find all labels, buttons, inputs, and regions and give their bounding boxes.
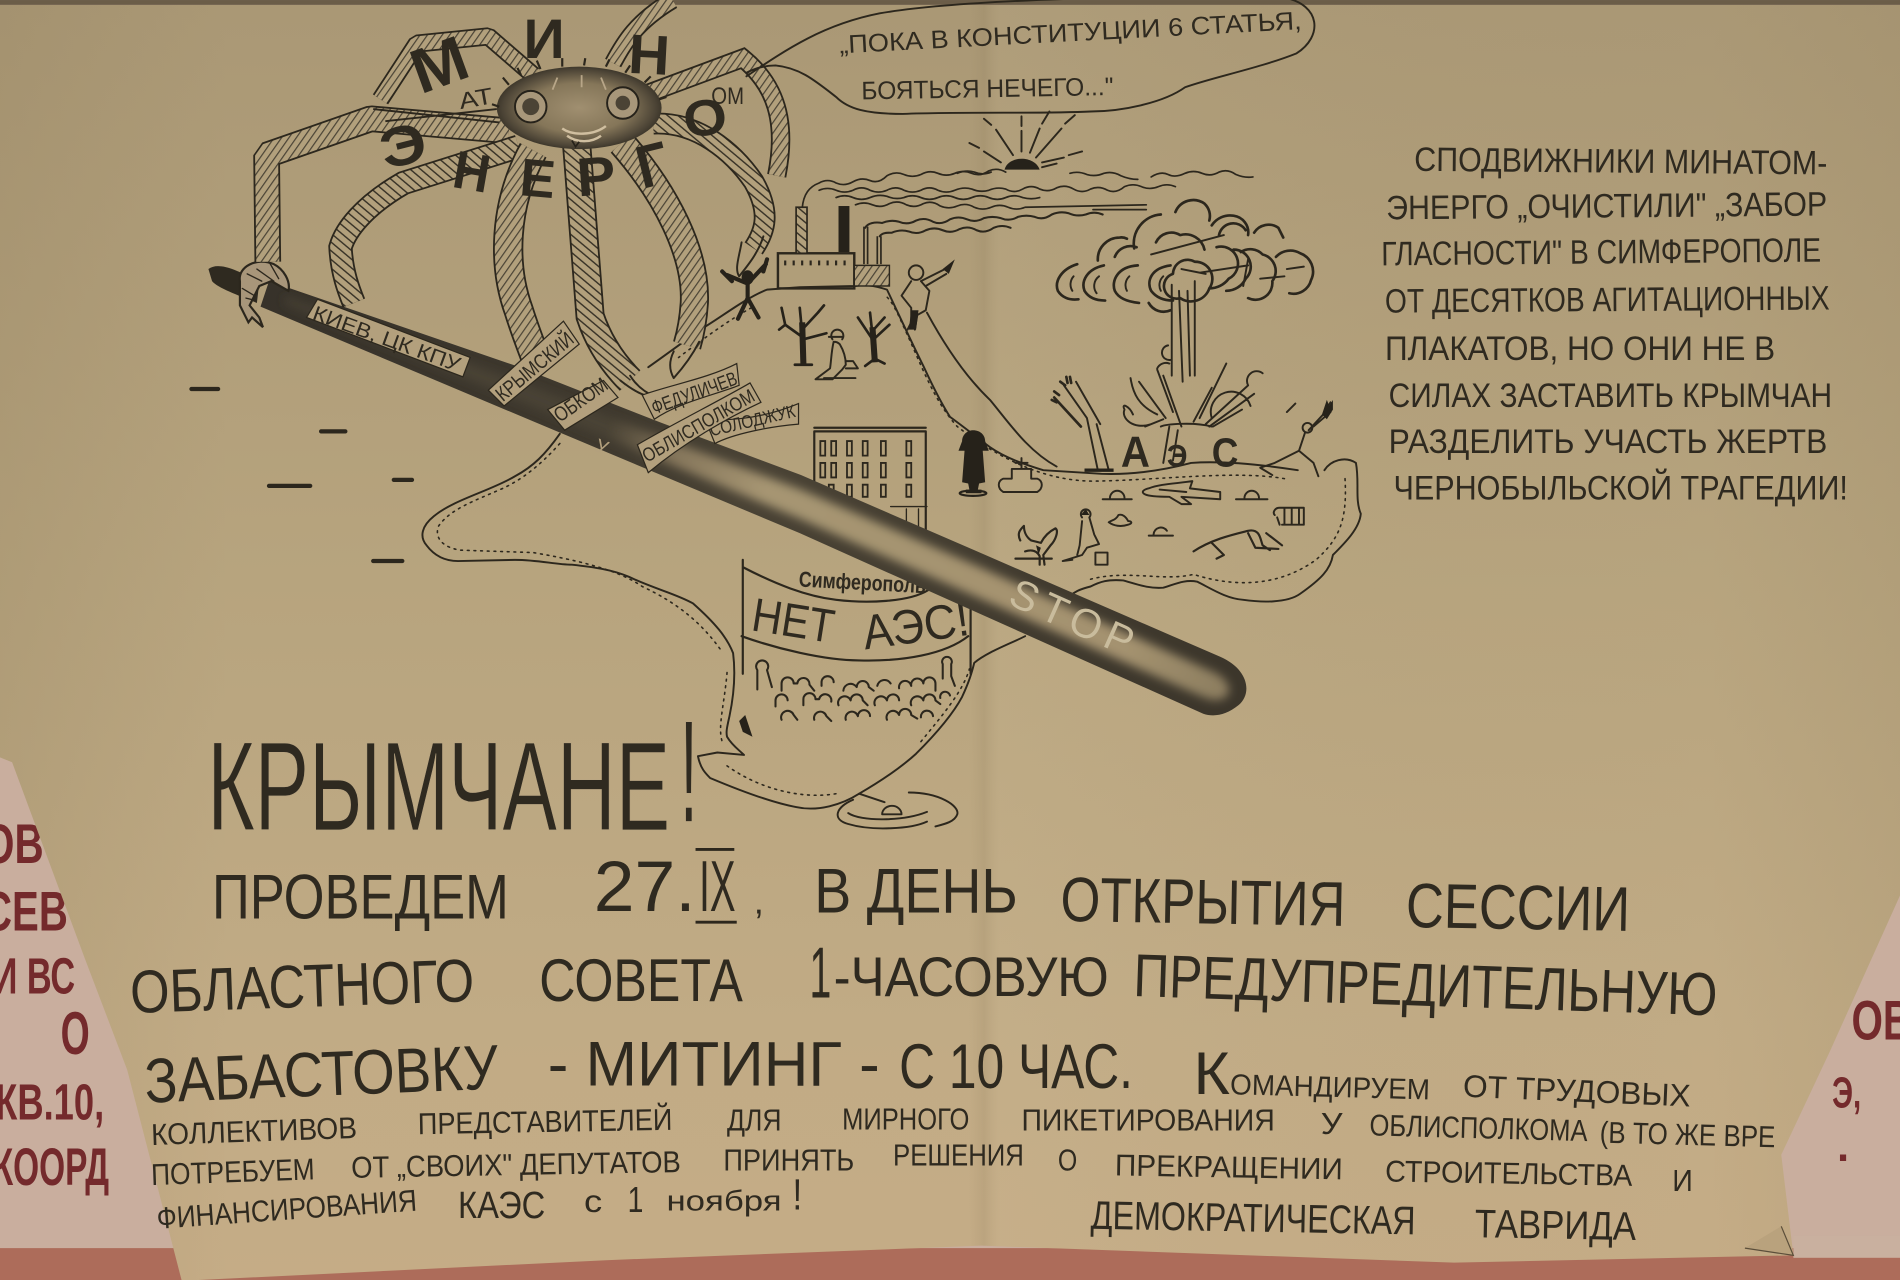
widow at grave (958, 430, 1042, 496)
small text line 4 (151, 1103, 1776, 1154)
spider letters МИН АТОМ ЭНЕРГО: Н (627, 23, 671, 87)
signature: Демократическая Таврида: ТАВРИДА (1475, 1202, 1637, 1249)
poster: Crimean anti-nuclear leaflet: ! (680, 690, 698, 853)
protest banner and crowd: Симферополь (798, 567, 927, 598)
letters: АЭС power plant: А (1121, 429, 1150, 477)
main call line 3: ОТ ТРУДОВЫХ (1462, 1068, 1691, 1114)
illustration: Crimea map with spider and rod (191, 0, 1361, 828)
main call line 3 (143, 1030, 1691, 1117)
leg 4 (508, 150, 537, 361)
text block: right column: ЧЕРНОБЫЛЬСКОЙ ТРАГЕДИИ! (1393, 469, 1848, 507)
main call line 1: IX (699, 846, 736, 927)
main call line 1: 27. (594, 847, 696, 927)
leg 1 upper left (380, 36, 533, 99)
small text line 5: И (1672, 1165, 1693, 1198)
small text line 4: ОБЛИСПОЛКОМА (1369, 1109, 1589, 1148)
text block: right column: ЭНЕРГО „ОЧИСТИЛИ" „ЗАБОР (1386, 185, 1827, 227)
spider letters МИН АТОМ ЭНЕРГО: Р (575, 145, 618, 208)
main call line 1: , (754, 881, 764, 922)
small text line 4: ПИКЕТИРОВАНИЯ (1021, 1105, 1275, 1138)
main call line 2: 1 (809, 932, 831, 1013)
label: Обком: ОБКОМ (549, 373, 612, 427)
dead trees and sitting man (779, 305, 889, 379)
small text line 4: (В ТО ЖЕ ВРЕ (1599, 1117, 1776, 1154)
leg 8 (648, 58, 781, 176)
leg 2 to hand (267, 119, 509, 262)
leg 9 upward (613, 0, 673, 63)
hand gripping rod (240, 262, 289, 327)
smoke streams (802, 169, 1253, 236)
neighbouring poster text, left (0, 813, 109, 1197)
small text line 6: ФИНАНСИРОВАНИЯ (156, 1185, 418, 1236)
main call line 1 (212, 846, 1631, 945)
spider letters МИН АТОМ ЭНЕРГО: О (679, 87, 731, 149)
spider body with face (492, 58, 666, 149)
text block: right column: СПОДВИЖНИКИ МИНАТОМ- (1414, 141, 1828, 182)
main call line 2: -ЧАСОВУЮ (834, 946, 1109, 1008)
building (814, 428, 927, 536)
text block: right column (1381, 141, 1848, 507)
mushroom cloud (1057, 200, 1313, 427)
leg 6 (622, 143, 699, 378)
leg 3 (340, 147, 519, 303)
speech bubble (746, 0, 1314, 114)
main call line 1: В ДЕНЬ (814, 856, 1018, 926)
main call line 3: ЗАБАСТОВКУ (143, 1033, 500, 1117)
rod label: Киев, ЦК КПУ: КИЕВ, ЦК КПУ (310, 302, 464, 377)
small text line 5: ОТ „СВОИХ" ДЕПУТАТОВ (351, 1146, 681, 1185)
small text line 5: ПОТРЕБУЕМ (151, 1153, 315, 1192)
small text line 5: О (1058, 1145, 1077, 1178)
main call line 2: ПРЕДУПРЕДИТЕЛЬНУЮ (1133, 941, 1719, 1028)
crimea map outline (422, 285, 1361, 809)
main call line 3: К (1194, 1039, 1230, 1107)
main call line 2: ОБЛАСТНОГО (129, 946, 475, 1026)
figure: man with raised torch on hill (902, 259, 955, 330)
banner slogan: НЕТ (748, 589, 838, 654)
victims lying on ground (1103, 481, 1304, 559)
small text line 4: МИРНОГО (842, 1103, 969, 1136)
spider letters МИН АТОМ ЭНЕРГО: АТ (457, 83, 495, 114)
sea dashes (191, 389, 412, 561)
small text line 6 (156, 1171, 802, 1236)
heading: Крымчане!: КРЫМЧАНЕ (207, 716, 670, 857)
small text line 5 (151, 1140, 1693, 1198)
spider letters МИН АТОМ ЭНЕРГО: Г (629, 128, 676, 202)
small text line 5: ПРИНЯТЬ (723, 1145, 854, 1178)
spider letters МИН АТОМ ЭНЕРГО: Э (373, 110, 433, 181)
small text line 5: СТРОИТЕЛЬСТВА (1385, 1155, 1633, 1193)
spider letters МИН АТОМ ЭНЕРГО: ОМ (711, 83, 744, 110)
spider letters МИН АТОМ ЭНЕРГО: Е (518, 148, 558, 210)
main call line 1: ПРОВЕДЕМ (212, 863, 509, 933)
small text line 4: У (1321, 1108, 1343, 1141)
letters: АЭС power plant: Э (1167, 438, 1188, 474)
label: Федуличев: ФЕДУЛИЧЕВ (649, 368, 740, 419)
neighbouring poster text, left: О (61, 999, 90, 1067)
main call line 3: ОМАНДИРУЕМ (1230, 1069, 1430, 1106)
signature: Демократическая Таврида (1090, 1194, 1637, 1249)
main call line 2 (129, 932, 1719, 1028)
small text line 6: ноября (666, 1186, 782, 1218)
bubble line 1: „ПОКА В КОНСТИТУЦИИ 6 СТАТЬЯ, (839, 7, 1302, 59)
figure: burning person (1260, 400, 1333, 476)
main call line 3: - МИТИНГ - (548, 1030, 880, 1100)
heading: Крымчане! (207, 690, 698, 857)
leg 5 (577, 147, 657, 397)
small text line 6: с (584, 1183, 602, 1219)
small text line 4: КОЛЛЕКТИВОВ (151, 1112, 358, 1152)
spider letters МИН АТОМ ЭНЕРГО (373, 8, 744, 210)
text block: right column: ПЛАКАТОВ, НО ОНИ НЕ В (1385, 330, 1775, 368)
banner slogan (748, 589, 972, 660)
letters: АЭС power plant: С (1212, 430, 1238, 476)
label: Облисполком: ОБЛИСПОЛКОМ (639, 385, 759, 467)
protest banner and crowd (739, 560, 972, 737)
letters: АЭС power plant (1121, 424, 1238, 477)
rod tip (208, 266, 259, 303)
rod word STOP: STOP (1003, 570, 1141, 665)
small text line 6: КАЭС (458, 1184, 545, 1226)
small text line 5: РЕШЕНИЯ (893, 1140, 1024, 1173)
small text line 5: ПРЕКРАЩЕНИИ (1115, 1149, 1343, 1186)
main call line 2: СОВЕТА (539, 946, 743, 1014)
small text line 6: ! (792, 1171, 802, 1219)
signature: Демократическая Таврида: ДЕМОКРАТИЧЕСКАЯ (1090, 1194, 1416, 1243)
sun and rays (969, 112, 1082, 170)
neighbouring poster text, right (1832, 990, 1900, 1171)
label: Солоджук: СОЛОДЖУК (708, 401, 798, 440)
text block: right column: СИЛАХ ЗАСТАВИТЬ КРЫМЧАН (1389, 377, 1832, 415)
spider letters МИН АТОМ ЭНЕРГО: Н (449, 140, 495, 205)
small text line 6: 1 (628, 1179, 643, 1220)
bubble line 2: БОЯТЬСЯ НЕЧЕГО..." (861, 73, 1114, 105)
neighbouring poster text, right: . (1837, 1123, 1849, 1171)
main call line 1: ОТКРЫТИЯ (1060, 865, 1346, 940)
small text line 4: ПРЕДСТАВИТЕЛЕЙ (418, 1103, 673, 1141)
label: У: У (592, 435, 612, 460)
leg 7 (653, 123, 765, 276)
rod body (261, 281, 1246, 715)
banner slogan: АЭС! (859, 592, 972, 660)
spider legs (267, 0, 781, 397)
dead tree with arms (1052, 377, 1114, 470)
spider letters МИН АТОМ ЭНЕРГО: И (523, 8, 565, 70)
crowd (739, 657, 955, 737)
main call line 3: С 10 ЧАС. (899, 1032, 1133, 1102)
text block: right column: ГЛАСНОСТИ" В СИМФЕРОПОЛЕ (1381, 232, 1821, 273)
text block: right column: РАЗДЕЛИТЬ УЧАСТЬ ЖЕРТВ (1389, 423, 1827, 461)
figure: man with raised arms (722, 259, 767, 319)
spider letters МИН АТОМ ЭНЕРГО: М (401, 23, 478, 108)
neighbouring poster text, right: Э, (1832, 1070, 1861, 1118)
factory (778, 206, 889, 288)
ripple with island (838, 792, 957, 828)
small text line 4: ДЛЯ (727, 1105, 782, 1138)
main call line 1: СЕССИИ (1405, 871, 1631, 945)
figures: woman with pram and kneeling man (1015, 509, 1108, 565)
label: Федуличев (642, 364, 740, 419)
label: Крымский: КРЫМСКИЙ (491, 327, 578, 406)
